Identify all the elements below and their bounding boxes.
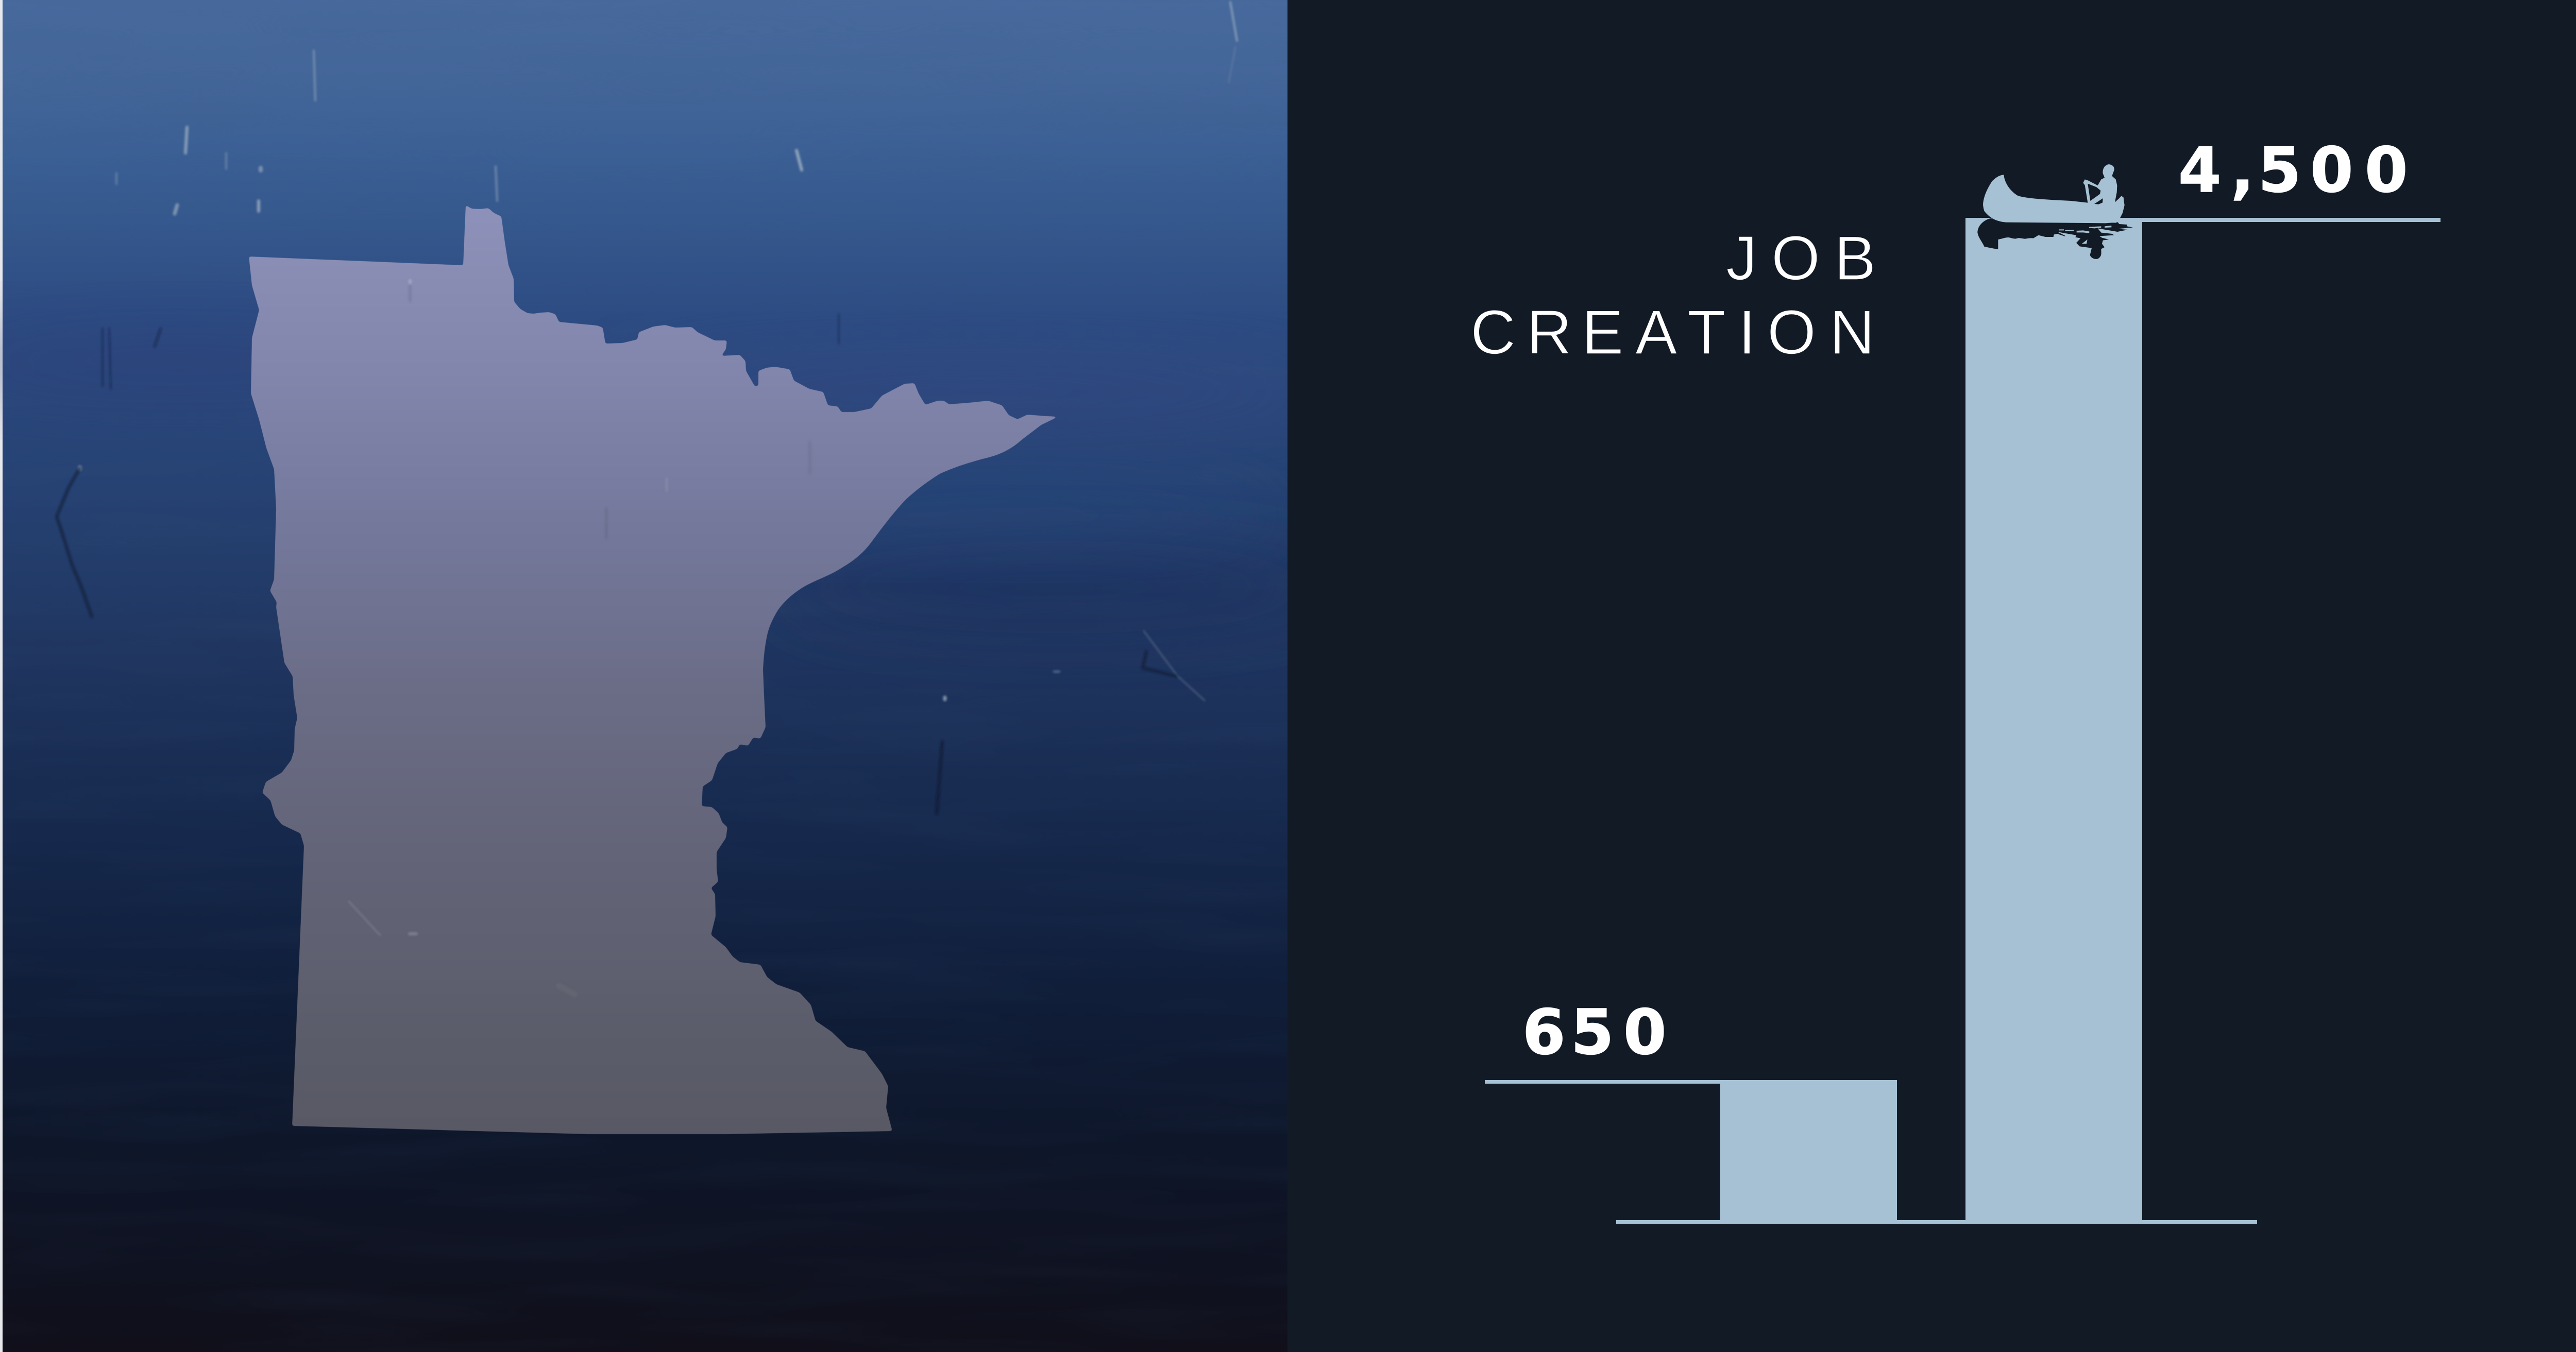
canoe hull and paddler xyxy=(1983,164,2125,223)
heading: JOB CREATION: J xyxy=(1726,223,1757,293)
leader line: 4,500 xyxy=(2142,218,2441,222)
bar chart: job creation xyxy=(1485,218,2441,1224)
bar: 650 jobs xyxy=(1720,1080,1897,1224)
value label: 4,500: 5 xyxy=(2258,135,2301,207)
reeds: dark stems on water xyxy=(57,314,1176,814)
canoe reflection xyxy=(1977,218,2133,259)
heading: JOB CREATION xyxy=(1470,223,1876,367)
value label: 650: 6 xyxy=(1522,997,1565,1069)
bar: 4,500 jobs xyxy=(1965,218,2142,1224)
heading: JOB CREATION: B xyxy=(1834,223,1876,293)
panel: dark chart background xyxy=(1287,0,2576,1352)
map: state of Minnesota silhouette xyxy=(249,205,1058,1134)
value label: 650: 5 xyxy=(1571,997,1614,1069)
heading: JOB CREATION: R xyxy=(1527,297,1572,367)
heading: JOB CREATION: N xyxy=(1829,297,1875,367)
value label: 4,500: 4 xyxy=(2178,135,2222,207)
panel: lake water photo background xyxy=(0,0,1345,1352)
icon: canoe with paddler and reflection xyxy=(1977,164,2133,259)
value label: 4,500: 0 xyxy=(2310,135,2353,207)
value label: 4,500: 0 xyxy=(2365,135,2408,207)
value label: 650: 0 xyxy=(1623,997,1666,1069)
heading: JOB CREATION: I xyxy=(1738,297,1756,367)
heading: JOB CREATION: E xyxy=(1582,297,1623,367)
heading: JOB CREATION: C xyxy=(1470,297,1516,367)
reeds: pale stems on water xyxy=(80,2,1237,700)
heading: JOB CREATION: O xyxy=(1767,297,1816,367)
leader line: 650 xyxy=(1485,1080,1720,1084)
heading: JOB CREATION: O xyxy=(1771,223,1820,293)
chart baseline xyxy=(1616,1220,2257,1224)
value label: 4,500: , xyxy=(2231,135,2255,207)
heading: JOB CREATION: T xyxy=(1687,297,1726,367)
heading: JOB CREATION: A xyxy=(1635,297,1677,367)
